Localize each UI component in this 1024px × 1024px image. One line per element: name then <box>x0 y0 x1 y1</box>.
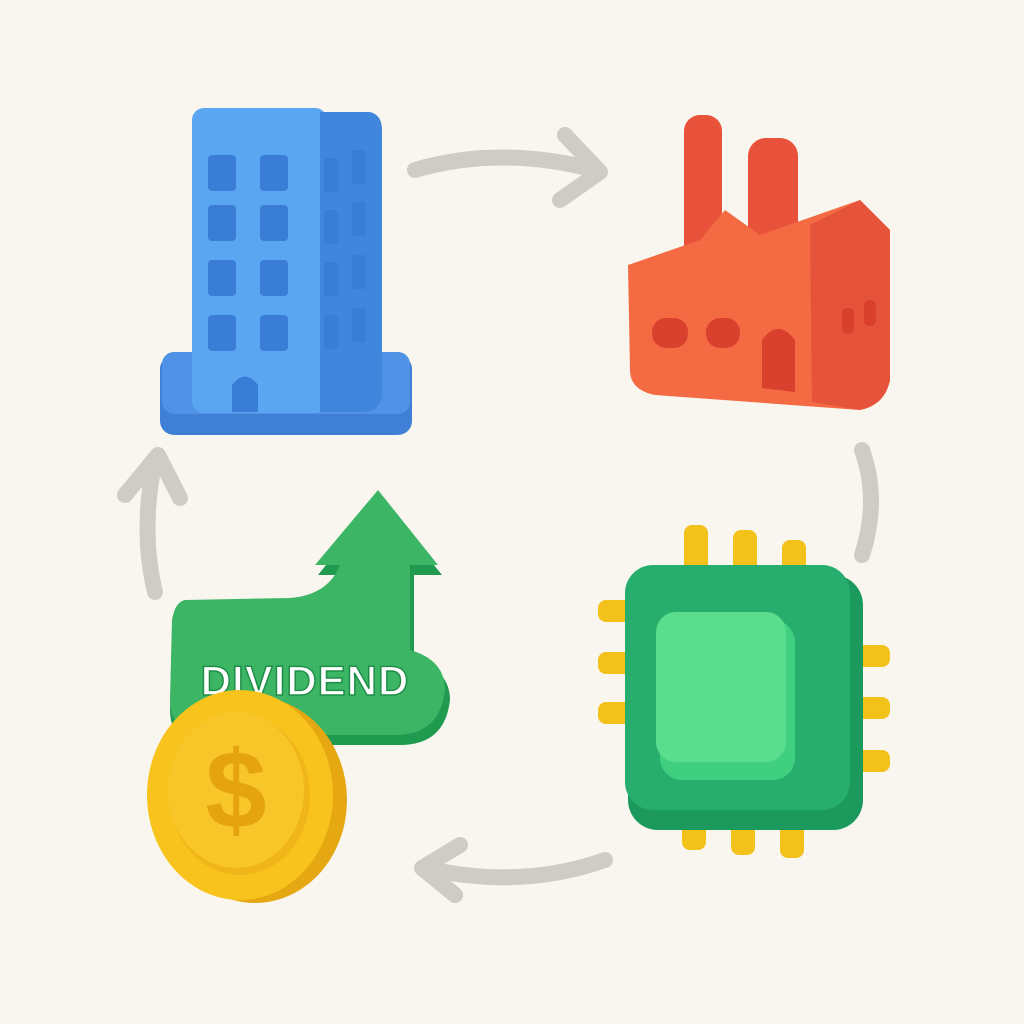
icon: dollar coin <box>147 690 347 903</box>
arrow: factory to chip <box>862 450 871 555</box>
icon: office building <box>160 108 412 435</box>
text: DIVIDEND: DIVIDEND <box>201 657 409 704</box>
arrow: chip to coin <box>422 845 605 895</box>
icon: factory <box>628 115 890 410</box>
icon: dividend arrow <box>170 490 450 745</box>
arrow: building to factory <box>415 135 600 200</box>
icon: microchip <box>598 525 890 858</box>
arrow: coin to building <box>125 455 180 592</box>
icon: dollar coin: $ <box>205 729 267 852</box>
